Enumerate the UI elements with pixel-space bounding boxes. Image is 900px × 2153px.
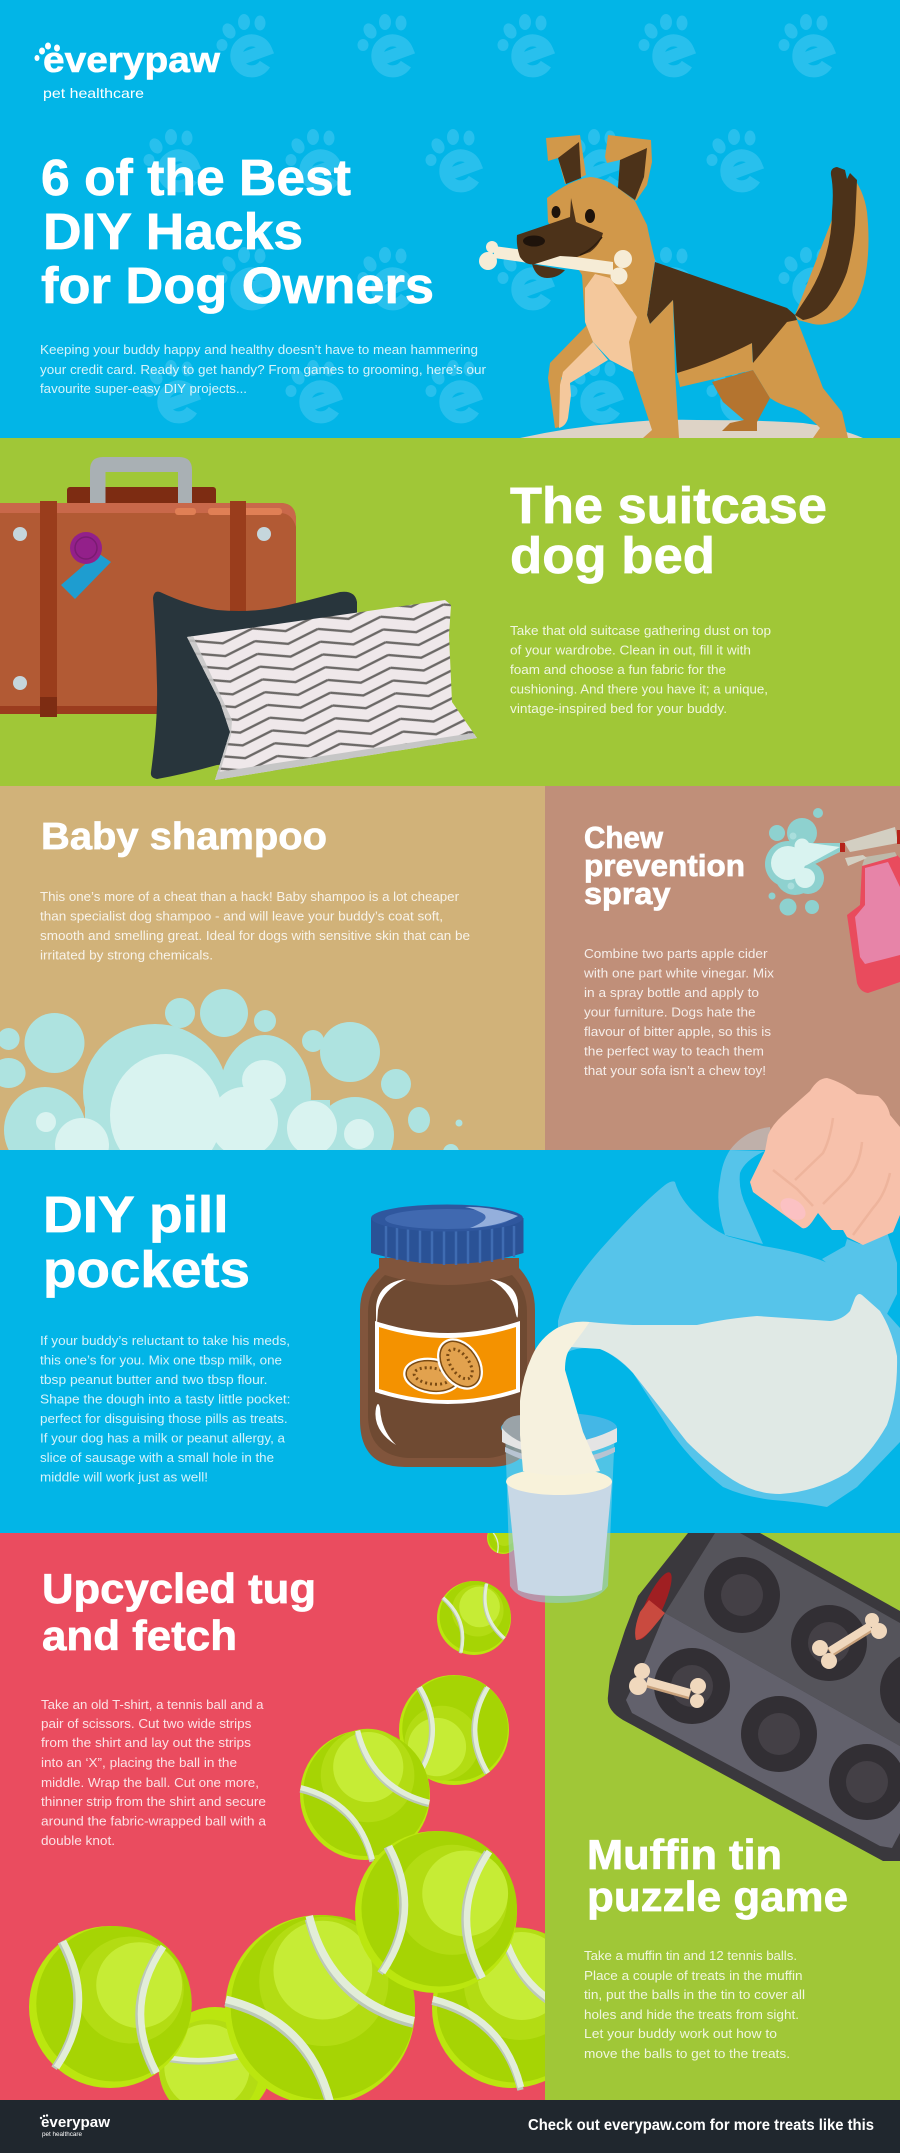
- intro text: Keeping your buddy happy and healthy doesn’t have to mean hammering: [40, 342, 478, 357]
- body text: cushioning. And there you have it; a unique,: [510, 682, 768, 696]
- illustration: spray bottle and mist: [765, 808, 900, 993]
- heading: [584, 820, 745, 911]
- illustration: tennis balls: [29, 1522, 592, 2121]
- panel: DIY pill pockets: [0, 1078, 900, 1603]
- body text: Take that old suitcase gathering dust on top: [510, 623, 771, 638]
- heading: Chew: [584, 820, 664, 855]
- illustration: suitcase: [0, 457, 296, 717]
- body text: this one’s for you. Mix one tbsp milk, one: [40, 1352, 282, 1368]
- illustration: hand: [750, 1078, 900, 1245]
- heading: [510, 477, 827, 584]
- illustration: bubbles: [0, 989, 462, 1150]
- logo: everypaw: pet healthcare: [43, 85, 144, 101]
- illustration: peanut butter jar: [360, 1204, 535, 1467]
- body text: double knot.: [41, 1833, 115, 1848]
- body text: slice of sausage with a small hole in the: [40, 1450, 274, 1465]
- paw watermark pattern: [144, 14, 834, 422]
- body text: middle. Wrap the ball. Cut one more,: [41, 1775, 259, 1790]
- body text: If your dog has a milk or peanut allergy, a: [40, 1430, 286, 1446]
- illustration: striped cushion: [187, 600, 477, 780]
- body text: your furniture. Dogs hate the: [584, 1004, 756, 1020]
- title: DIY Hacks: [43, 203, 303, 260]
- illustration: dark cushion: [151, 592, 357, 779]
- body text: [583, 946, 775, 1078]
- illustration: dog with bone: [479, 135, 868, 438]
- body text: pair of scissors. Cut two wide strips: [41, 1716, 252, 1731]
- body text: Combine two parts apple cider: [584, 946, 768, 961]
- body text: perfect for disguising those pills as treats.: [40, 1411, 288, 1426]
- heading: DIY pill: [43, 1186, 228, 1243]
- footer call to action: Check out everypaw.com for more treats like this: [528, 2117, 874, 2134]
- heading: Baby shampoo: [41, 816, 327, 858]
- body text: Place a couple of treats in the muffin: [584, 1968, 802, 1983]
- illustration: muffin tin with treats: [608, 1533, 900, 1861]
- body text: from the shirt and lay out the strips: [41, 1735, 252, 1750]
- body text: [40, 1333, 290, 1484]
- heading: pockets: [43, 1241, 250, 1298]
- body text: than specialist dog shampoo - and will leave your buddy’s coat soft,: [40, 908, 443, 924]
- body text: Let your buddy work out how to: [584, 2026, 777, 2041]
- body text: smooth and smelling great. Ideal for dogs with sensitive skin that can be: [40, 928, 470, 943]
- panel: upcycled tug and fetch: [0, 1533, 545, 2100]
- body text: vintage-inspired bed for your buddy.: [510, 701, 727, 716]
- body text: that your sofa isn’t a chew toy!: [584, 1063, 766, 1078]
- heading: and fetch: [42, 1612, 237, 1659]
- body text: holes and hide the treats from sight.: [584, 2007, 799, 2022]
- panel: footer: [0, 2100, 900, 2153]
- heading: [587, 1831, 848, 1920]
- title: [41, 149, 434, 314]
- body text: [510, 623, 771, 716]
- heading: Upcycled tug: [42, 1565, 316, 1612]
- label with peanuts: [375, 1321, 520, 1404]
- body text: foam and choose a fun fabric for the: [510, 662, 726, 677]
- body text: [41, 1697, 267, 1848]
- body text: Shape the dough into a tasty little pocket:: [40, 1392, 290, 1406]
- footer logo: [40, 2114, 111, 2138]
- panel: muffin tin puzzle game: [545, 1533, 900, 2100]
- footer logo: everypaw: [41, 2115, 111, 2131]
- body text: tbsp peanut butter and two tbsp flour.: [40, 1372, 268, 1387]
- heading: [43, 1186, 250, 1298]
- body text: flavour of bitter apple, so this is: [584, 1024, 772, 1039]
- panel: the suitcase dog bed: [0, 438, 900, 786]
- body text: [584, 1948, 805, 2061]
- panel: hero: [34, 14, 868, 438]
- logo: everypaw: [34, 39, 221, 101]
- body text: tin, put the balls in the tin to cover all: [584, 1987, 805, 2002]
- body text: thinner strip from the shirt and secure: [41, 1794, 266, 1809]
- body text: [40, 889, 470, 962]
- body text: the perfect way to teach them: [584, 1044, 764, 1058]
- panel: baby shampoo: [0, 786, 545, 1176]
- bone: [479, 241, 632, 284]
- body text: around the fabric-wrapped ball with a: [41, 1814, 267, 1829]
- body text: in a spray bottle and apply to: [584, 985, 759, 1000]
- title: for Dog Owners: [41, 257, 434, 314]
- body text: Take a muffin tin and 12 tennis balls.: [584, 1948, 797, 1963]
- heading: puzzle game: [587, 1873, 848, 1920]
- illustration: milk jug: [558, 1127, 900, 1507]
- body text: with one part white vinegar. Mix: [583, 966, 775, 980]
- body text: irritated by strong chemicals.: [40, 948, 213, 962]
- panel: chew prevention spray: [545, 786, 900, 1150]
- logo: everypaw: everypaw: [43, 39, 221, 80]
- body text: of your wardrobe. Clean in out, fill it with: [510, 642, 751, 658]
- body text: Take an old T-shirt, a tennis ball and a: [41, 1697, 264, 1712]
- body text: move the balls to get to the treats.: [584, 2046, 790, 2061]
- intro text: [40, 342, 487, 396]
- intro text: favourite super-easy DIY projects...: [40, 381, 247, 396]
- title: 6 of the Best: [41, 149, 351, 206]
- body text: This one’s more of a cheat than a hack! Baby shampoo is a lot cheaper: [40, 889, 460, 904]
- intro text: your credit card. Ready to get handy? From games to grooming, here’s our: [40, 362, 487, 377]
- heading: dog bed: [510, 527, 715, 584]
- footer logo: pet healthcare: [42, 2132, 83, 2138]
- heading: prevention: [584, 848, 745, 883]
- heading: Muffin tin: [587, 1831, 782, 1878]
- heading: The suitcase: [510, 477, 827, 534]
- illustration: glass of milk: [501, 1413, 617, 1603]
- illustration: pouring milk stream: [520, 1322, 600, 1476]
- body text: If your buddy’s reluctant to take his meds,: [40, 1333, 290, 1348]
- heading: [42, 1565, 316, 1659]
- body text: middle will work just as well!: [40, 1470, 208, 1484]
- body text: into an ‘X”, placing the ball in the: [41, 1755, 237, 1770]
- treat bones: [629, 1613, 887, 1708]
- heading: spray: [584, 876, 671, 911]
